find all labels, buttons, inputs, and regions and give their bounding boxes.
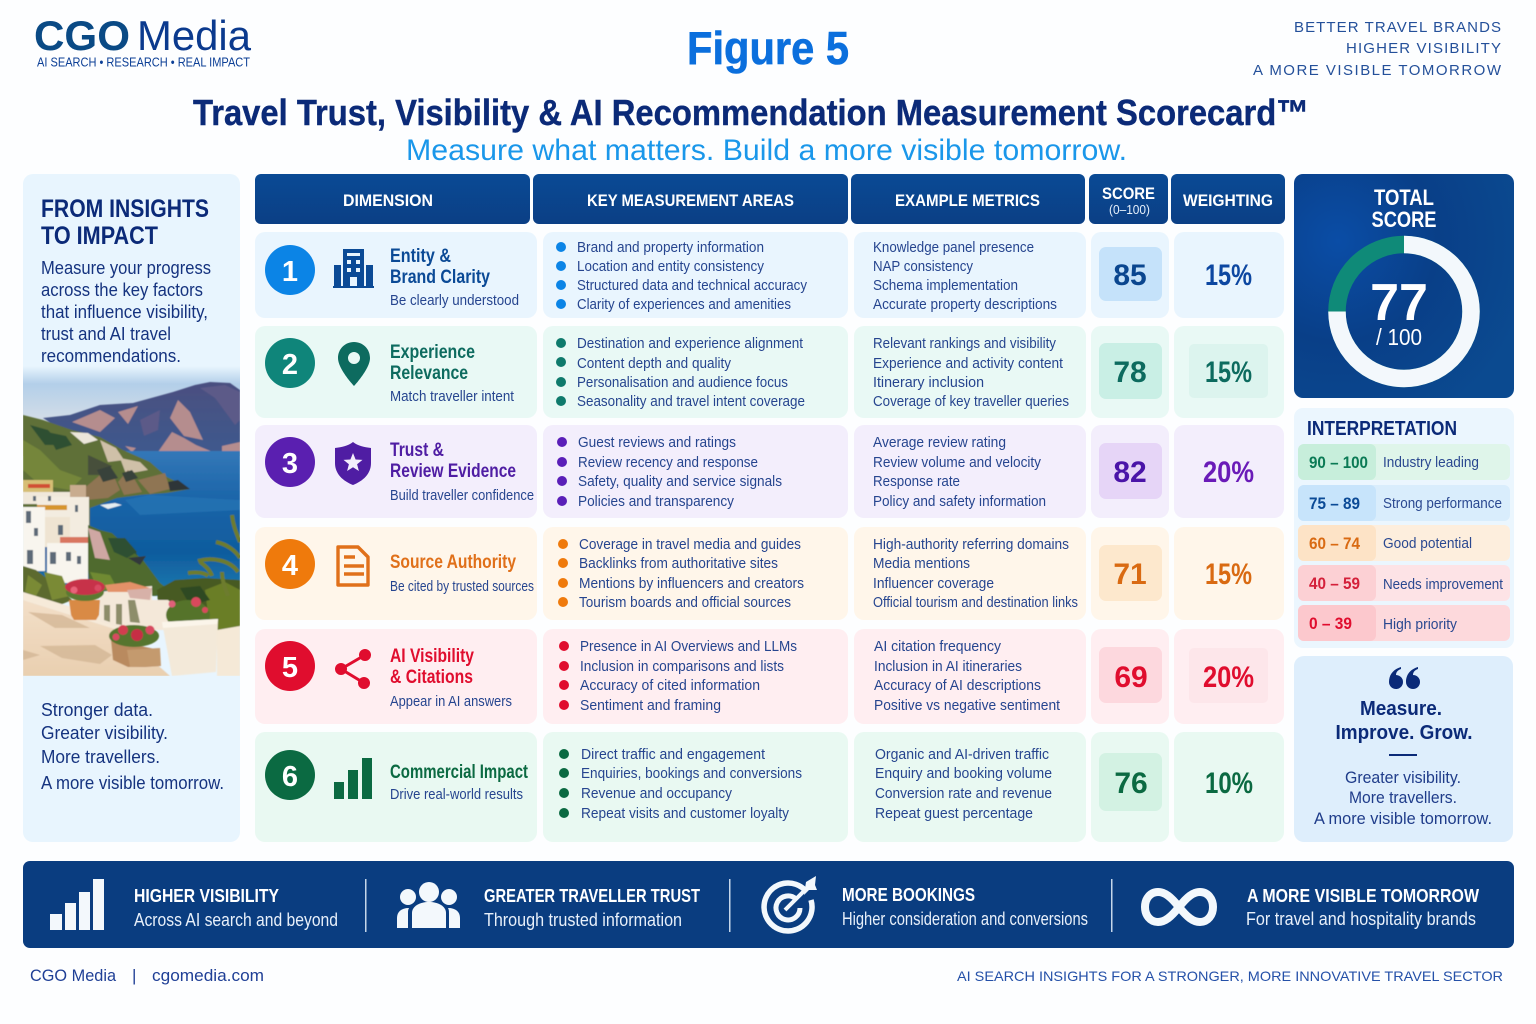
band 75-89	[1298, 485, 1510, 521]
closing statement: A more visible tomorrow.	[41, 773, 224, 793]
key areas list 3: Policies and transparency	[578, 493, 734, 510]
band 40-59: Needs improvement	[1383, 576, 1504, 593]
subtitle: Measure what matters. Build a more visible tomorrow.	[406, 134, 1127, 167]
example metrics 1: NAP consistency	[873, 258, 973, 275]
footer right: strapline: AI SEARCH INSIGHTS FOR A STRONGER, MORE INNOVATIVE TRAVEL SECTOR	[957, 968, 1503, 984]
score 82	[1099, 443, 1162, 499]
number badge 1: 1	[282, 256, 298, 288]
example metrics 2: Itinerary inclusion	[873, 374, 984, 391]
dimension label 4	[390, 552, 534, 595]
quote headline	[1336, 698, 1472, 744]
key areas list 1: Brand and property information	[577, 239, 764, 256]
icon: location pin	[338, 342, 370, 386]
table header row: WEIGHTING	[1183, 191, 1273, 210]
footer left: brand and website: |	[132, 966, 136, 985]
weighting 20%: 20%	[1203, 661, 1254, 694]
logo: CGO Media: Media	[137, 12, 252, 59]
key areas list 3: Guest reviews and ratings	[578, 434, 736, 451]
dimension label 4: Be cited by trusted sources	[390, 578, 534, 595]
number badge 2	[265, 338, 315, 388]
score 71: 71	[1113, 558, 1147, 591]
dimension label 3: Build traveller confidence	[390, 487, 534, 504]
closing statement: Stronger data.	[41, 700, 153, 720]
logo: CGO Media: CGO	[34, 12, 130, 59]
quote body: A more visible tomorrow.	[1314, 809, 1492, 828]
benefit: a more visible tomorrow: For travel and hospitality brands	[1246, 909, 1476, 929]
quote body	[1314, 768, 1492, 828]
score 78: 78	[1113, 356, 1147, 389]
band 40-59	[1298, 565, 1510, 601]
dimension label 4: Source Authority	[390, 552, 516, 573]
table header row: EXAMPLE METRICS	[895, 191, 1040, 210]
example metrics 5: AI citation frequency	[874, 638, 1001, 655]
key areas list 5: Accuracy of cited information	[580, 677, 760, 694]
example metrics 1: Knowledge panel presence	[873, 239, 1034, 256]
score 69: 69	[1114, 661, 1148, 694]
icon: bar chart	[334, 758, 372, 799]
dimension label 3	[390, 440, 534, 504]
weighting 20%: 20%	[1203, 456, 1254, 489]
example metrics 6: Enquiry and booking volume	[875, 765, 1052, 782]
key areas list 2: Destination and experience alignment	[577, 335, 804, 352]
key areas list 4: Coverage in travel media and guides	[579, 536, 801, 553]
example metrics 6	[875, 746, 1052, 822]
key areas list 1: Structured data and technical accuracy	[577, 277, 807, 294]
score 78	[1099, 343, 1162, 399]
example metrics 4: Official tourism and destination links	[873, 594, 1078, 611]
key areas list 3	[557, 434, 782, 510]
band 90-100: Industry leading	[1383, 454, 1479, 471]
number badge 1	[265, 245, 315, 295]
key areas list 5: Presence in AI Overviews and LLMs	[580, 638, 797, 655]
key areas list 6	[559, 746, 802, 822]
key areas list 2: Content depth and quality	[577, 355, 731, 372]
score 69	[1099, 647, 1162, 703]
score 76: 76	[1114, 767, 1148, 800]
example metrics 3: Response rate	[873, 473, 960, 490]
icon: shield with star	[335, 442, 371, 485]
band 75-89: Strong performance	[1383, 495, 1502, 512]
key areas list 2: Seasonality and travel intent coverage	[577, 393, 805, 410]
key areas list 6: Direct traffic and engagement	[581, 746, 766, 763]
intro text: recommendations.	[41, 346, 181, 366]
intro text: trust and AI travel	[41, 324, 171, 344]
dimension label 5: AI Visibility	[390, 646, 474, 667]
dimension label 2: Experience	[390, 342, 475, 363]
key areas list 5: Inclusion in comparisons and lists	[580, 658, 784, 675]
band 75-89: 75 – 89	[1309, 494, 1360, 513]
panel: total score	[1294, 174, 1514, 398]
quote headline: Improve. Grow.	[1336, 722, 1472, 744]
example metrics 2	[873, 335, 1069, 410]
key areas list 6: Revenue and occupancy	[581, 785, 732, 802]
closing statement: Greater visibility.	[41, 723, 168, 743]
key areas list 1: Clarity of experiences and amenities	[577, 296, 791, 313]
figure label: Figure 5	[687, 22, 849, 74]
key areas list 4: Tourism boards and official sources	[579, 594, 791, 611]
heading: from insights to impact	[41, 195, 209, 250]
benefit: greater traveller trust: Through trusted information	[484, 910, 682, 930]
example metrics 6: Organic and AI-driven traffic	[875, 746, 1049, 763]
icon: share nodes	[336, 650, 370, 688]
panel: from insights to impact	[23, 174, 240, 842]
key areas list 4	[558, 536, 804, 611]
top right tagline: A MORE VISIBLE TOMORROW	[1253, 62, 1502, 79]
score value 77 / 100: 77	[1370, 274, 1428, 332]
benefit: higher visibility: Across AI search and beyond	[134, 910, 338, 930]
quote headline: Measure.	[1360, 698, 1442, 720]
main title: Travel Trust, Visibility & AI Recommendation Measurement Scorecard™	[193, 92, 1309, 133]
dimension label 6	[390, 762, 529, 803]
example metrics 2: Coverage of key traveller queries	[873, 393, 1069, 410]
bottom benefits bar	[23, 861, 1514, 948]
dimension label 1: Be clearly understood	[390, 292, 519, 309]
example metrics 4: High-authority referring domains	[873, 536, 1069, 553]
table header row: KEY MEASUREMENT AREAS	[587, 191, 794, 210]
icon: rising bars	[50, 879, 104, 930]
footer left: brand and website	[30, 966, 264, 985]
weighting 10%: 10%	[1205, 767, 1253, 800]
benefit: more bookings: Higher consideration and conversions	[842, 909, 1088, 929]
dimension label 1	[390, 246, 519, 309]
dimension label 2: Relevance	[390, 363, 468, 384]
table header row: (0–100)	[1109, 202, 1150, 217]
number badge 2: 2	[282, 349, 298, 381]
key areas list 4: Mentions by influencers and creators	[579, 575, 804, 592]
benefit: a more visible tomorrow	[1246, 886, 1479, 929]
closing statement	[41, 700, 224, 793]
number badge 3: 3	[282, 448, 298, 480]
quote body: More travellers.	[1349, 788, 1457, 807]
intro text: that influence visibility,	[41, 302, 208, 322]
key areas list 2	[556, 335, 805, 410]
intro text	[41, 258, 211, 366]
logo: CGO Media: AI SEARCH • RESEARCH • REAL IMPACT	[37, 56, 250, 70]
intro text: across the key factors	[41, 280, 203, 300]
example metrics 2: Relevant rankings and visibility	[873, 335, 1056, 352]
interpretation heading: INTERPRETATION	[1307, 418, 1457, 440]
example metrics 5: Positive vs negative sentiment	[874, 697, 1061, 714]
heading: from insights to impact: TO IMPACT	[41, 222, 158, 250]
dimension label 5: & Citations	[390, 667, 473, 688]
band 90-100: 90 – 100	[1309, 453, 1368, 472]
example metrics 2: Experience and activity content	[873, 355, 1064, 372]
dimension label 6: Drive real-world results	[390, 786, 523, 803]
dimension label 3: Trust &	[390, 440, 444, 461]
example metrics 1: Accurate property descriptions	[873, 296, 1057, 313]
row 4: source authority	[255, 527, 1284, 620]
band 0-39: 0 – 39	[1309, 614, 1352, 633]
key areas list 5: Sentiment and framing	[580, 697, 721, 714]
number badge 4: 4	[282, 550, 298, 582]
benefit: greater traveller trust	[484, 886, 700, 930]
weighting 15%	[1189, 344, 1268, 398]
dimension label 5	[390, 646, 512, 710]
dimension label 1: Entity &	[390, 246, 451, 267]
heading: from insights to impact: FROM INSIGHTS	[41, 195, 209, 223]
intro text: Measure your progress	[41, 258, 211, 278]
number badge 6	[265, 750, 315, 800]
score 85: 85	[1113, 259, 1147, 292]
band 0-39	[1298, 605, 1510, 641]
example metrics 4	[873, 536, 1078, 611]
icon: people	[397, 882, 460, 928]
dimension label 1: Brand Clarity	[390, 267, 490, 288]
band 90-100	[1298, 444, 1510, 480]
number badge 5	[265, 641, 315, 691]
score 82: 82	[1113, 456, 1147, 489]
total score heading: SCORE	[1372, 207, 1436, 232]
weighting 15%: 15%	[1205, 259, 1252, 292]
benefit: more bookings	[842, 885, 1088, 929]
icon: target with arrow	[764, 876, 817, 931]
example metrics 4: Influencer coverage	[873, 575, 994, 592]
total score heading: TOTAL	[1374, 185, 1434, 210]
dimension label 3: Review Evidence	[390, 461, 516, 482]
key areas list 4: Backlinks from authoritative sites	[579, 555, 778, 572]
weighting 15%: 15%	[1205, 558, 1252, 591]
score 85	[1099, 247, 1162, 301]
example metrics 3: Average review rating	[873, 434, 1006, 451]
band 0-39: High priority	[1383, 616, 1457, 633]
panel: interpretation	[1294, 408, 1514, 648]
panel: quote	[1294, 656, 1513, 842]
band 60-74: Good potential	[1383, 535, 1472, 552]
row 1: entity and brand clarity	[255, 232, 1284, 318]
icon: infinity	[1145, 892, 1213, 922]
benefit: greater traveller trust: GREATER TRAVELLER TRUST	[484, 886, 700, 906]
row 3: trust and review evidence	[255, 425, 1284, 518]
icon: document	[338, 547, 368, 585]
photo: coastal village	[23, 366, 240, 676]
logo: CGO Media	[34, 12, 252, 70]
table header row	[255, 174, 1285, 224]
score 76	[1099, 753, 1162, 811]
footer left: brand and website: cgomedia.com	[152, 966, 264, 985]
key areas list 6: Enquiries, bookings and conversions	[581, 765, 802, 782]
key areas list 1: Location and entity consistency	[577, 258, 764, 275]
number badge 6: 6	[282, 761, 298, 793]
icon: building	[333, 249, 374, 288]
weighting 20%	[1189, 648, 1268, 703]
weighting 15%: 15%	[1205, 356, 1252, 389]
number badge 5: 5	[282, 652, 298, 684]
top right tagline	[1253, 19, 1502, 79]
row 5: AI visibility and citations	[255, 629, 1284, 724]
top right tagline: BETTER TRAVEL BRANDS	[1294, 19, 1501, 36]
closing statement: More travellers.	[41, 747, 160, 767]
band 60-74	[1298, 525, 1510, 561]
total score heading	[1372, 185, 1436, 232]
benefit: higher visibility	[134, 886, 338, 930]
row 2: experience relevance	[255, 326, 1284, 418]
key areas list 3: Review recency and response	[578, 454, 758, 471]
example metrics 1	[873, 239, 1057, 313]
example metrics 5: Inclusion in AI itineraries	[874, 658, 1022, 675]
key areas list 3: Safety, quality and service signals	[578, 473, 782, 490]
example metrics 5: Accuracy of AI descriptions	[874, 677, 1041, 694]
score 71	[1099, 545, 1162, 601]
benefit: higher visibility: HIGHER VISIBILITY	[134, 886, 279, 906]
dimension label 6: Commercial Impact	[390, 762, 529, 783]
band 60-74: 60 – 74	[1309, 534, 1360, 553]
key areas list 5	[559, 638, 797, 714]
example metrics 3: Review volume and velocity	[873, 454, 1041, 471]
key areas list 6: Repeat visits and customer loyalty	[581, 805, 789, 822]
key areas list 2: Personalisation and audience focus	[577, 374, 788, 391]
donut gauge	[1337, 244, 1471, 378]
example metrics 3: Policy and safety information	[873, 493, 1046, 510]
number badge 3	[265, 437, 315, 487]
key areas list 1	[556, 239, 807, 313]
number badge 4	[265, 539, 315, 589]
dimension label 2: Match traveller intent	[390, 388, 515, 405]
example metrics 5	[874, 638, 1061, 714]
band 40-59: 40 – 59	[1309, 574, 1360, 593]
icon: quotation marks	[1389, 667, 1420, 689]
example metrics 4: Media mentions	[873, 555, 970, 572]
footer left: brand and website: CGO Media	[30, 966, 117, 985]
example metrics 6: Conversion rate and revenue	[875, 785, 1052, 802]
table header row: DIMENSION	[343, 191, 433, 210]
example metrics 3	[873, 434, 1046, 510]
dimension label 5: Appear in AI answers	[390, 693, 512, 710]
dimension label 2	[390, 342, 515, 405]
row 6: commercial impact	[255, 732, 1284, 842]
top right tagline: HIGHER VISIBILITY	[1346, 40, 1501, 57]
benefit: more bookings: MORE BOOKINGS	[842, 885, 975, 905]
quote body: Greater visibility.	[1345, 768, 1461, 787]
score value 77 / 100: / 100	[1376, 324, 1422, 350]
table header row: SCORE	[1102, 184, 1155, 203]
example metrics 6: Repeat guest percentage	[875, 805, 1033, 822]
benefit: a more visible tomorrow: A MORE VISIBLE TOMORROW	[1247, 886, 1479, 906]
example metrics 1: Schema implementation	[873, 277, 1018, 294]
